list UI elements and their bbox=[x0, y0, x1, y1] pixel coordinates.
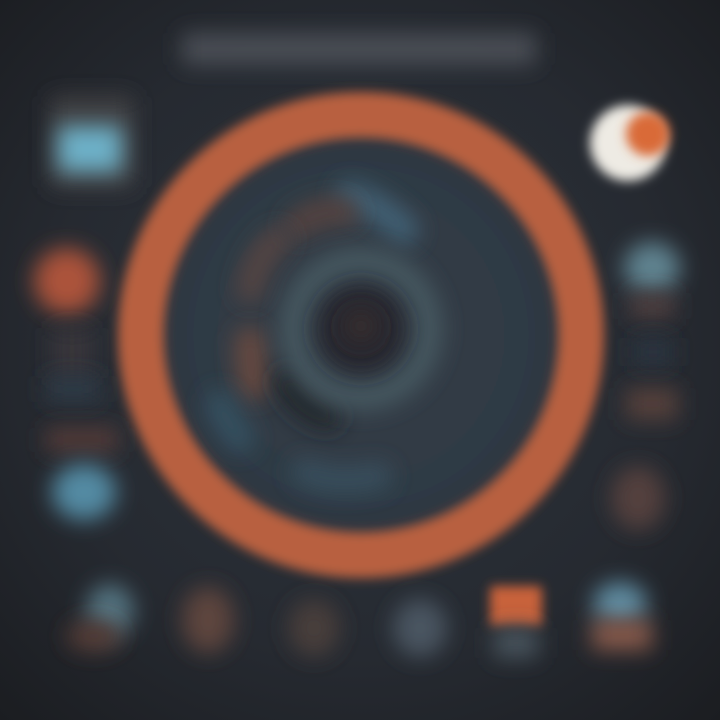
icon: orange box bbox=[490, 586, 542, 658]
icon: blue window, top left bbox=[50, 96, 134, 188]
icon: grey blue bbox=[393, 599, 447, 657]
central dial bbox=[141, 115, 581, 555]
icon: red circle, left bbox=[34, 248, 100, 402]
icon: white and orange pie, top right bbox=[590, 105, 670, 181]
icon: faint brown bbox=[288, 599, 340, 657]
centre dark hub bbox=[317, 285, 405, 373]
icon: brown label, right bbox=[626, 388, 678, 420]
icon: blue box with brown header, lower left bbox=[46, 428, 118, 520]
brown arc segment, top bbox=[298, 211, 345, 225]
dark shadow below inner ring bbox=[288, 382, 328, 416]
inner blue ring bbox=[294, 262, 428, 396]
icon: brown bbox=[182, 587, 234, 653]
icon: blue and brown box bbox=[592, 582, 652, 650]
blue arc segment, upper right bbox=[350, 196, 404, 230]
teal arc segment, lower left bbox=[220, 405, 240, 438]
teal arc segment, bottom bbox=[305, 472, 378, 480]
brown arc segment, upper left bbox=[250, 240, 278, 290]
inner disc bbox=[156, 130, 566, 540]
title bar (illegible blurred heading) bbox=[182, 33, 536, 65]
icon: blue and brown bbox=[66, 584, 134, 652]
centre hub glow bbox=[345, 310, 377, 342]
orange outer ring bbox=[141, 115, 581, 555]
icon: blue badge, right bbox=[624, 242, 680, 366]
brown arc segment, left bbox=[250, 342, 254, 385]
bottom icon row bbox=[66, 582, 652, 658]
icon: brown person, lower right bbox=[611, 466, 665, 530]
